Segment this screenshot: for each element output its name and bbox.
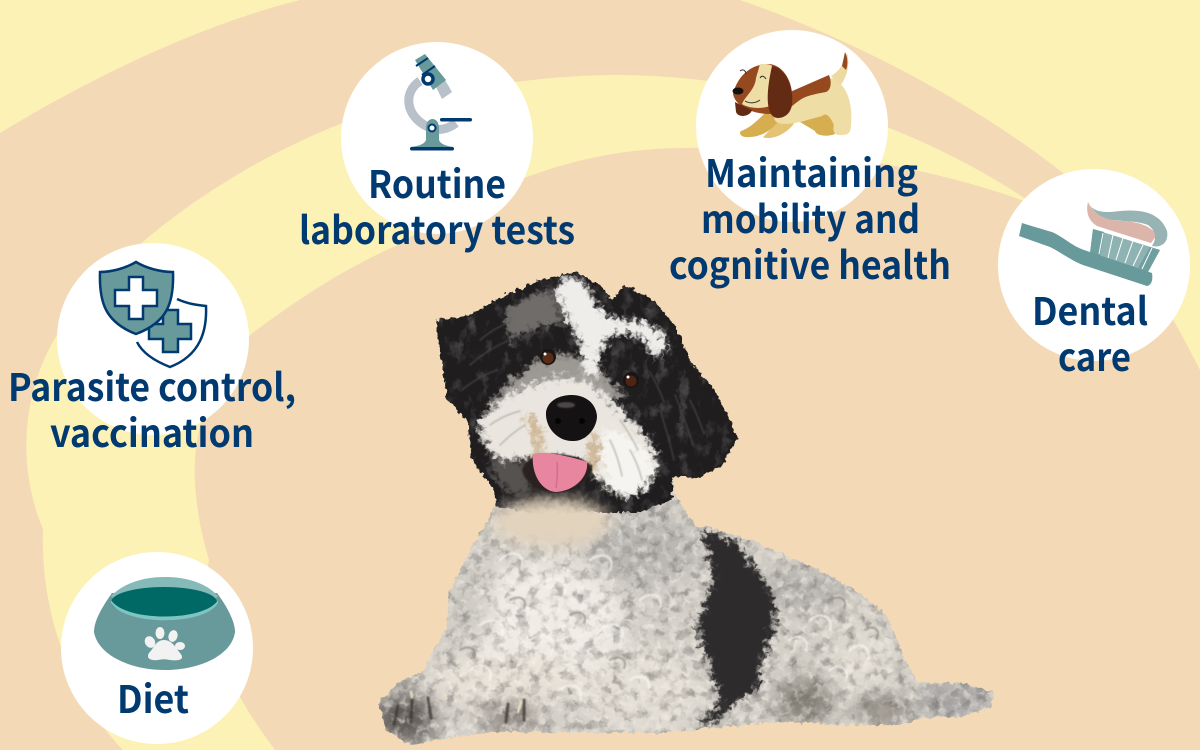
- circle: mobility: [696, 30, 888, 222]
- panel: parasite control, vaccination: [8, 243, 296, 458]
- icon: toothbrush with paste: [1019, 202, 1167, 286]
- label: routine laboratory tests: laboratory tests: [299, 200, 575, 255]
- icon: shields with crosses: [100, 262, 206, 367]
- background: yellow swirl band: [26, 75, 1035, 750]
- muzzle fur: [478, 377, 658, 497]
- circle: diet: [61, 552, 253, 744]
- head dark fur: [430, 268, 745, 514]
- eyes: [540, 349, 639, 388]
- label: diet: Diet: [117, 669, 189, 724]
- panel: routine laboratory tests: [299, 42, 575, 255]
- circle: parasite control: [57, 243, 249, 435]
- label: maintaining mobility and cognitive health: cognitive health: [669, 235, 951, 290]
- hind paw pads: [875, 704, 891, 716]
- icon: microscope: [409, 54, 472, 150]
- label: maintaining mobility and cognitive health: Maintaining: [705, 143, 918, 198]
- panel: dental care: [998, 169, 1190, 382]
- label: maintaining mobility and cognitive health: mobility and: [701, 189, 920, 244]
- icon: dog bowl with paw: [94, 577, 235, 670]
- black side patch: [697, 527, 776, 727]
- label: dental care: Dental: [1032, 281, 1148, 336]
- mouth and tongue: [522, 453, 592, 492]
- label: dental care: care: [1058, 327, 1131, 382]
- panel: diet: [61, 552, 253, 744]
- label: parasite control, vaccination: [8, 357, 296, 458]
- paw toes: [394, 692, 524, 724]
- label: parasite control, vaccination: vaccination: [50, 403, 254, 458]
- tan neck bib: [494, 498, 610, 546]
- label: parasite control, vaccination: Parasite control,: [8, 357, 296, 412]
- label: dental care: [1032, 281, 1148, 382]
- white forehead: [556, 278, 668, 376]
- nose: [546, 395, 597, 441]
- grey forehead: [505, 290, 565, 345]
- label: maintaining mobility and cognitive health: [669, 143, 951, 290]
- icon: playful puppy: [732, 52, 851, 138]
- panel: mobility and cognitive health: [669, 30, 951, 290]
- label: routine laboratory tests: [299, 154, 575, 255]
- label: routine laboratory tests: Routine: [368, 154, 506, 209]
- dog photo illustration: [370, 260, 1010, 750]
- fur strokes: [460, 322, 878, 700]
- circle: laboratory tests: [341, 42, 533, 234]
- circle: dental care: [998, 169, 1190, 361]
